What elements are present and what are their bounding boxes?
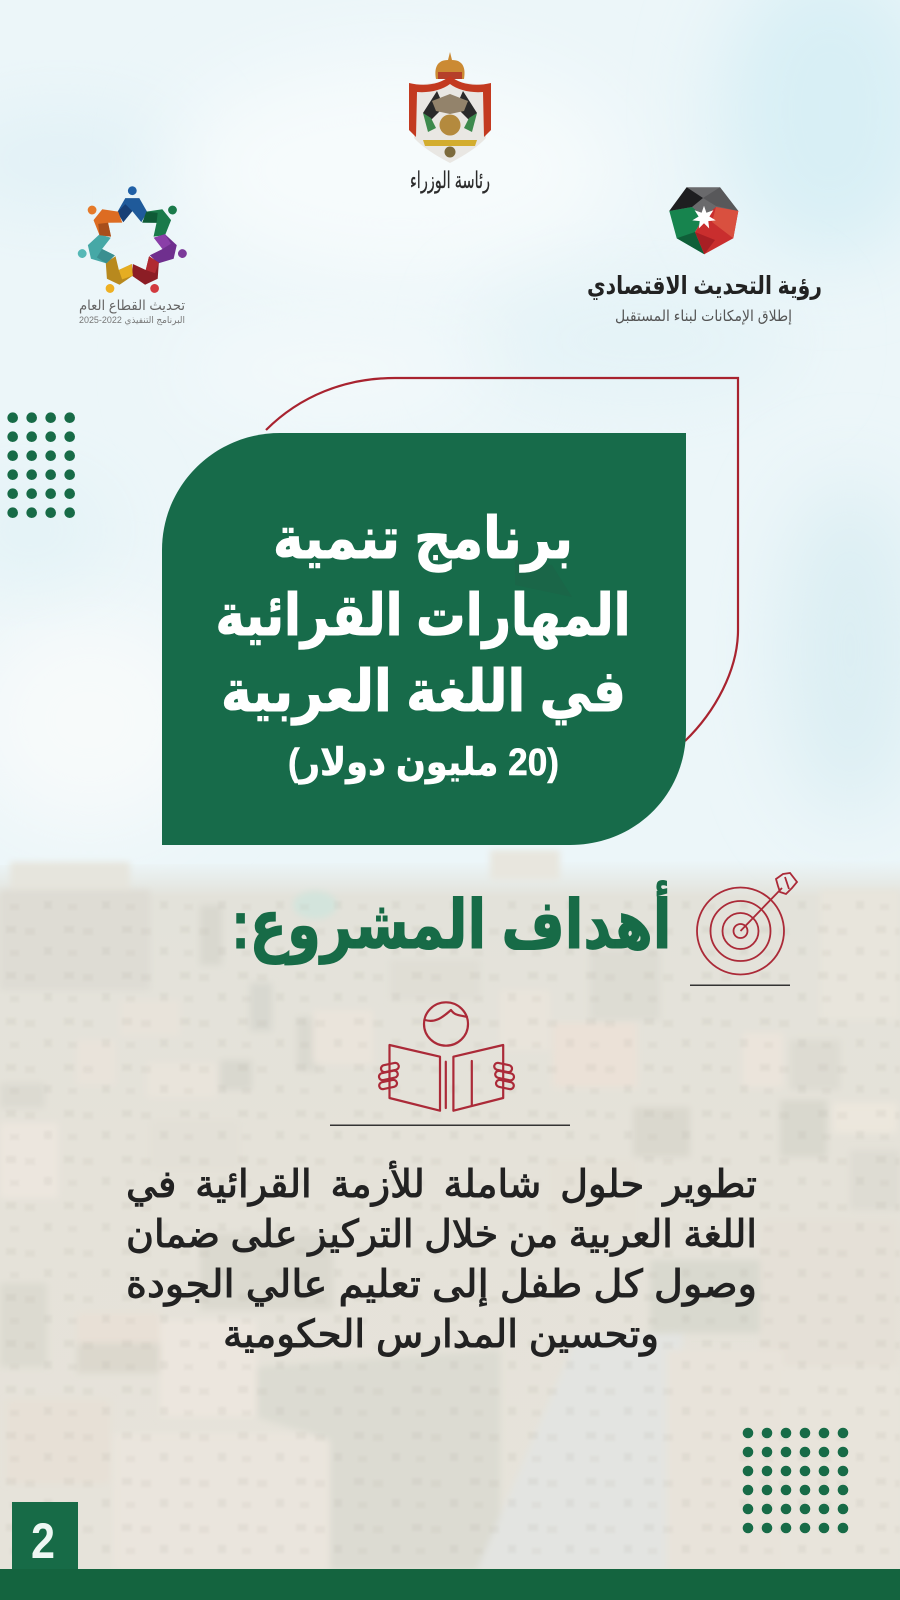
- logo: coat of arms: [409, 52, 491, 194]
- label: prime ministry: رئاسة الوزراء: [410, 167, 490, 194]
- line 3: وصول كل طفل إلى تعليم عالي الجودة: [126, 1264, 757, 1307]
- logo: economic modernisation vision: [587, 187, 822, 325]
- icon: target: [697, 873, 797, 974]
- shield: [414, 82, 486, 163]
- logo subtitle: البرنامج التنفيذي 2022-2025: [79, 315, 185, 325]
- background: faded city: [0, 850, 900, 1600]
- title line 2: المهارات القرائية: [216, 583, 630, 650]
- heptagon mark: [669, 187, 738, 254]
- background: sky: [0, 0, 900, 920]
- eagle: [432, 94, 468, 114]
- logo title: تحديث القطاع العام: [79, 297, 185, 314]
- people ring: [75, 186, 190, 299]
- title panel: [162, 433, 686, 845]
- hands: [378, 1062, 515, 1090]
- crown: [435, 52, 465, 79]
- white star: [692, 206, 716, 228]
- ribbon: [423, 140, 477, 146]
- page number: 2: [31, 1513, 55, 1569]
- divider: reading: [330, 1124, 570, 1126]
- line 4: وتحسين المدارس الحكومية: [223, 1314, 659, 1357]
- line 2: اللغة العربية من خلال التركيز على ضمان: [126, 1214, 757, 1257]
- dots: top left: [7, 412, 75, 518]
- star: [444, 146, 456, 158]
- orb: [440, 114, 460, 136]
- divider: target: [690, 984, 790, 986]
- title outline: red curve: [266, 378, 738, 741]
- logo subtitle: إطلاق الإمكانات لبناء المستقبل: [615, 308, 792, 325]
- budget line: (20 مليون دولار): [288, 742, 559, 785]
- logo title: رؤية التحديث الاقتصادي: [587, 272, 822, 301]
- title line 1: برنامج تنمية: [273, 506, 573, 573]
- dots: bottom right: [743, 1428, 848, 1533]
- flags: [423, 91, 477, 132]
- logo: public sector modernisation: [75, 186, 190, 325]
- goal description: [126, 1160, 757, 1357]
- line 1: تطوير حلول شاملة للأزمة القرائية في: [126, 1160, 757, 1207]
- page number box: [12, 1502, 78, 1569]
- title line 3: في اللغة العربية: [221, 659, 626, 726]
- mantle: [409, 76, 491, 137]
- heading: project goals: أهداف المشروع:: [232, 880, 672, 965]
- icon: child reading: [378, 1002, 515, 1111]
- bottom band: [0, 1569, 900, 1600]
